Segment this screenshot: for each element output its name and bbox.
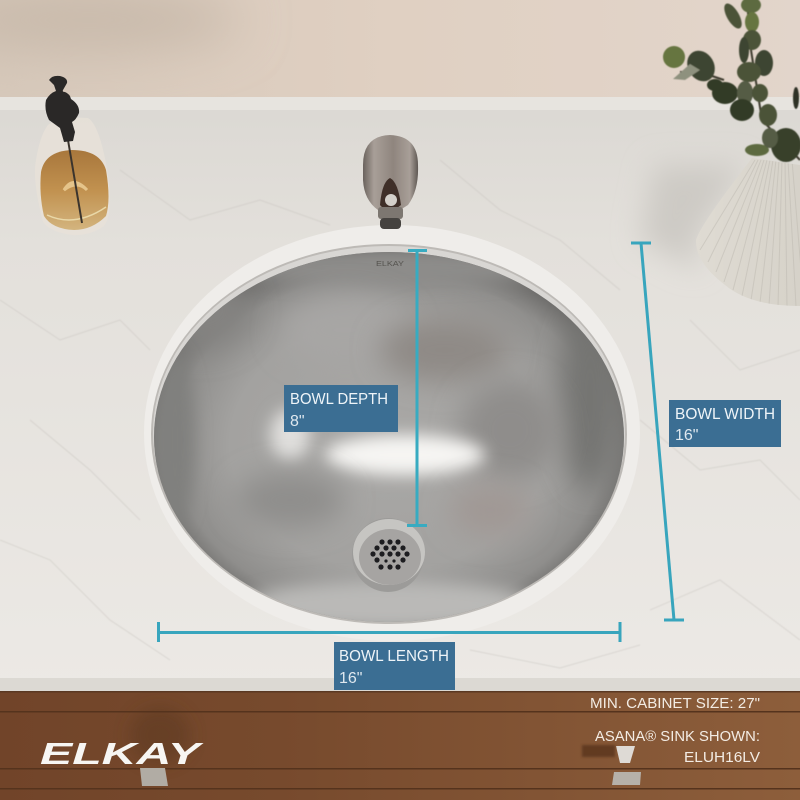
callout: bowl depth: BOWL DEPTH [290, 391, 388, 408]
callout: bowl width [669, 400, 781, 447]
sink rim [144, 225, 640, 641]
bowl width dimension line [631, 243, 684, 620]
icon: cabinet handle left [140, 768, 168, 786]
sink model text [595, 729, 760, 766]
sink model text: ASANA® SINK SHOWN: [595, 729, 760, 745]
brand mark on bowl: ELKAY [376, 261, 404, 268]
marble countertop [0, 97, 800, 691]
callout: bowl depth: 8" [290, 413, 305, 430]
callout: bowl depth [284, 385, 398, 432]
bowl length dimension line [157, 622, 622, 642]
icon: drain [352, 518, 425, 592]
sink bowl [150, 244, 627, 629]
wood cabinet [0, 691, 800, 800]
icon: faucet [363, 135, 418, 229]
callout: bowl length: 16" [339, 670, 362, 687]
icon: cabinet handle right [582, 745, 641, 785]
wall background [0, 0, 800, 98]
icon: ribbed vase [696, 158, 800, 306]
sink model text: ELUH16LV [684, 750, 760, 766]
callout: bowl width: 16" [675, 427, 698, 444]
callout: bowl width: BOWL WIDTH [675, 406, 775, 423]
callout: bowl length: BOWL LENGTH [339, 648, 449, 665]
icon: eucalyptus plant [663, 0, 800, 162]
min cabinet size text: MIN. CABINET SIZE: 27" [590, 696, 760, 712]
bowl depth dimension line [407, 249, 427, 527]
icon: soap dispenser [35, 76, 110, 235]
Elkay logo: ELKAY [40, 736, 205, 771]
callout: bowl length [334, 642, 455, 690]
